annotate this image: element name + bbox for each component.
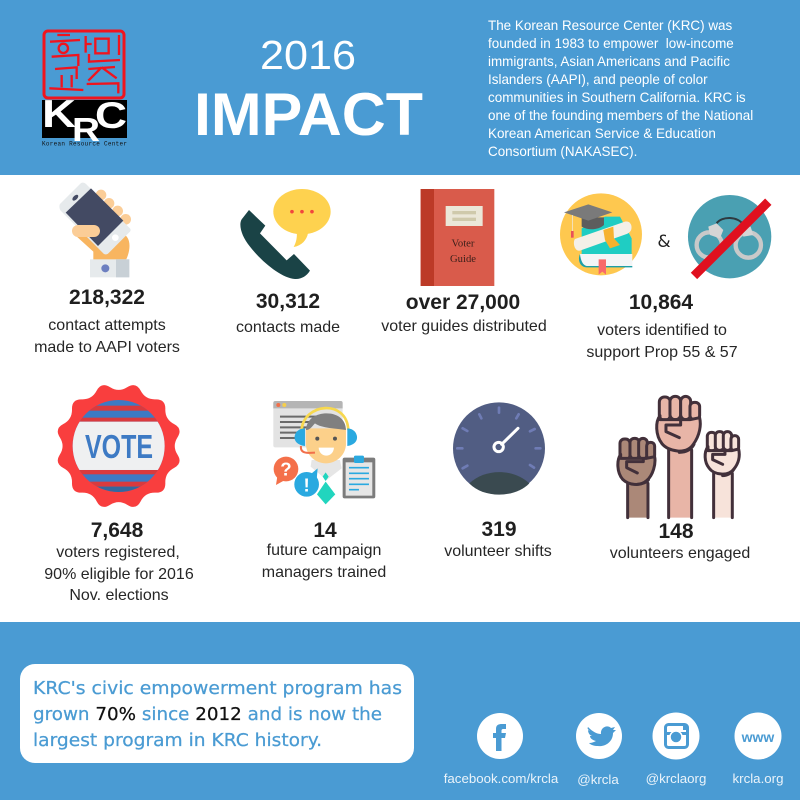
- stat: campaign managers: 14: [313, 519, 337, 542]
- header description: founded in 1983 to empower low-income: [488, 36, 734, 51]
- stat: prop voters: [586, 291, 738, 361]
- stat: prop voters: support Prop 55 & 57: [586, 344, 738, 361]
- icon: vote badge: VOTE: [85, 429, 153, 466]
- callout: KRC's civic empowerment program has: [33, 678, 402, 699]
- callout: [20, 664, 414, 763]
- header description: Consortium (NAKASEC).: [488, 144, 637, 159]
- stat: voters registered: [44, 519, 194, 604]
- header band: [0, 0, 800, 175]
- title: 2016: [260, 32, 356, 78]
- stat: campaign managers: managers trained: [262, 564, 386, 581]
- icon: telephone with speech bubble: [240, 189, 331, 279]
- icon: crossed-out handcuffs: [688, 195, 771, 278]
- icon: hand holding phone: [59, 183, 131, 277]
- icon: voter guide book: [421, 189, 494, 286]
- logo: KRC: K: [42, 93, 76, 136]
- stat: contacts made: [236, 290, 340, 336]
- stat: voters registered: Nov. elections: [69, 587, 169, 604]
- stat: volunteer shifts: volunteer shifts: [444, 543, 552, 560]
- header description: The Korean Resource Center (KRC) was: [488, 18, 732, 33]
- icon: vote badge: [58, 385, 180, 507]
- icon: speedometer gauge: [453, 402, 545, 495]
- icon: voter guide book: Guide: [450, 254, 476, 265]
- stat: contact attempts: contact attempts: [48, 317, 166, 334]
- stat: voters registered: voters registered,: [56, 544, 180, 561]
- logo: KRC: Korean Resource Center: [42, 140, 127, 148]
- header description: Islanders (AAPI), and people of color: [488, 72, 708, 87]
- stat: volunteers engaged: 148: [658, 520, 694, 543]
- social: facebook: facebook.com/krcla: [444, 771, 559, 786]
- social: twitter: @krcla: [577, 772, 619, 787]
- ampersand: &: [657, 232, 671, 252]
- right fist: [705, 432, 739, 518]
- logo: KRC: C: [95, 95, 127, 136]
- icon: graduation books: [560, 193, 642, 275]
- header description: one of the founding members of the National: [488, 108, 753, 123]
- left fist: [618, 438, 655, 518]
- social: twitter: [576, 713, 622, 787]
- stat: volunteer shifts: [444, 518, 552, 560]
- stat: voter guides: voter guides distributed: [381, 318, 547, 335]
- callout: largest program in KRC history.: [33, 730, 322, 751]
- header description: communities in Southern California. KRC is: [488, 90, 746, 105]
- stat: volunteers engaged: [610, 520, 750, 562]
- stat: voter guides: [381, 291, 547, 335]
- icon: campaign manager: !: [304, 474, 310, 495]
- stat: contacts made: 30,312: [256, 290, 320, 313]
- stat: prop voters: 10,864: [629, 291, 693, 314]
- header description: Korean American Service & Education: [488, 126, 716, 141]
- social: website: [732, 712, 784, 786]
- stat: volunteers engaged: volunteers engaged: [610, 545, 750, 562]
- stat: volunteer shifts: 319: [481, 518, 517, 541]
- icon: campaign manager: ?: [280, 459, 292, 480]
- social: facebook: [444, 713, 559, 786]
- social: website: krcla.org: [732, 771, 784, 786]
- stat: campaign managers: future campaign: [267, 542, 381, 559]
- icon: raised fists: [618, 396, 739, 518]
- stat: contact attempts: [34, 286, 180, 356]
- stat: contact attempts: 218,322: [69, 286, 145, 309]
- stat: contact attempts: made to AAPI voters: [34, 339, 180, 356]
- logo: KRC: [42, 31, 127, 148]
- footer band: [0, 622, 800, 800]
- title: [194, 32, 423, 148]
- icon: campaign manager: [273, 401, 375, 504]
- middle fist: [657, 396, 700, 518]
- stat: contacts made: contacts made: [236, 319, 340, 336]
- social: website: www: [741, 729, 774, 745]
- stat: campaign managers: [262, 519, 386, 581]
- stat: voters registered: 7,648: [91, 519, 144, 542]
- logo: KRC: R: [72, 111, 100, 148]
- stat: prop voters: voters identified to: [597, 322, 727, 339]
- title: IMPACT: [194, 81, 423, 148]
- icon: voter guide book: Voter: [452, 239, 475, 250]
- social: instagram: @krclaorg: [646, 771, 706, 786]
- stat: voter guides: over 27,000: [406, 291, 520, 314]
- social: instagram: [646, 712, 706, 786]
- callout: grown 70% since 2012 and is now the: [33, 704, 382, 725]
- header description: immigrants, Asian Americans and Pacific: [488, 54, 730, 69]
- stat: voters registered: 90% eligible for 2016: [44, 566, 194, 583]
- header description: [488, 18, 753, 159]
